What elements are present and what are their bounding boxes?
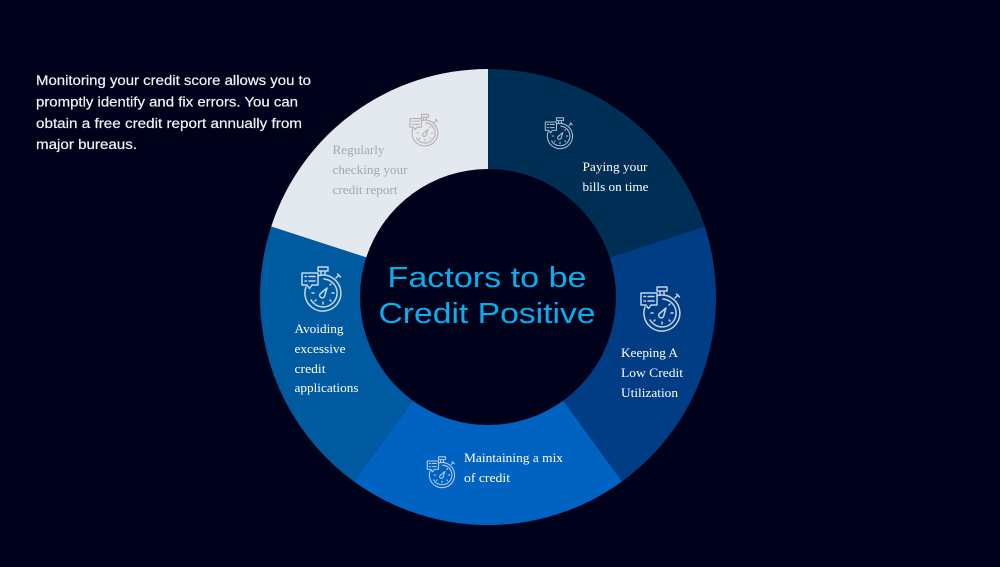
segment: regularly checking your credit report: [271, 69, 488, 257]
label: avoiding excessive credit applications: Avoiding: [294, 322, 344, 336]
intro text block: promptly identify and fix errors. You can: [36, 94, 298, 110]
intro text block: Monitoring your credit score allows you to: [36, 73, 311, 88]
label: keeping a low credit utilization: Keeping A: [621, 346, 678, 360]
label: keeping a low credit utilization: Utilization: [621, 386, 679, 400]
center title: Credit Positive: [378, 298, 596, 330]
label: regularly checking your credit report: credit report: [332, 183, 398, 197]
segment: avoiding excessive credit applications: [260, 226, 413, 482]
intro text block: [36, 73, 311, 152]
label: avoiding excessive credit applications: [294, 322, 359, 395]
label: regularly checking your credit report: checking your: [332, 163, 408, 177]
icon: stopwatch: [427, 457, 455, 488]
icon: stopwatch: [641, 287, 680, 331]
label: avoiding excessive credit applications: excessive: [294, 342, 346, 356]
donut chart: [260, 69, 716, 525]
label: avoiding excessive credit applications: applications: [294, 381, 359, 395]
icon: stopwatch: [410, 114, 438, 146]
label: maintaining a mix of credit: of credit: [464, 471, 511, 485]
label: paying your bills on time: Paying your: [582, 160, 648, 174]
intro text block: obtain a free credit report annually from: [36, 116, 302, 131]
label: maintaining a mix of credit: [464, 451, 564, 485]
intro text block: major bureaus.: [36, 137, 137, 152]
label: keeping a low credit utilization: [621, 346, 684, 400]
label: regularly checking your credit report: [332, 143, 408, 197]
icon: stopwatch: [545, 118, 573, 149]
label: avoiding excessive credit applications: credit: [294, 362, 326, 376]
segment: paying your bills on time: [488, 69, 705, 257]
label: paying your bills on time: bills on time: [582, 180, 649, 194]
label: paying your bills on time: [582, 160, 649, 194]
icon: stopwatch: [302, 267, 341, 311]
label: keeping a low credit utilization: Low Credit: [621, 366, 684, 380]
center title: [378, 262, 596, 330]
label: regularly checking your credit report: Regularly: [332, 143, 385, 157]
center title: Factors to be: [388, 262, 586, 294]
segment: maintaining a mix of credit: [354, 401, 622, 525]
segment: keeping a low credit utilization: [563, 226, 716, 482]
label: maintaining a mix of credit: Maintaining a mix: [464, 451, 564, 465]
